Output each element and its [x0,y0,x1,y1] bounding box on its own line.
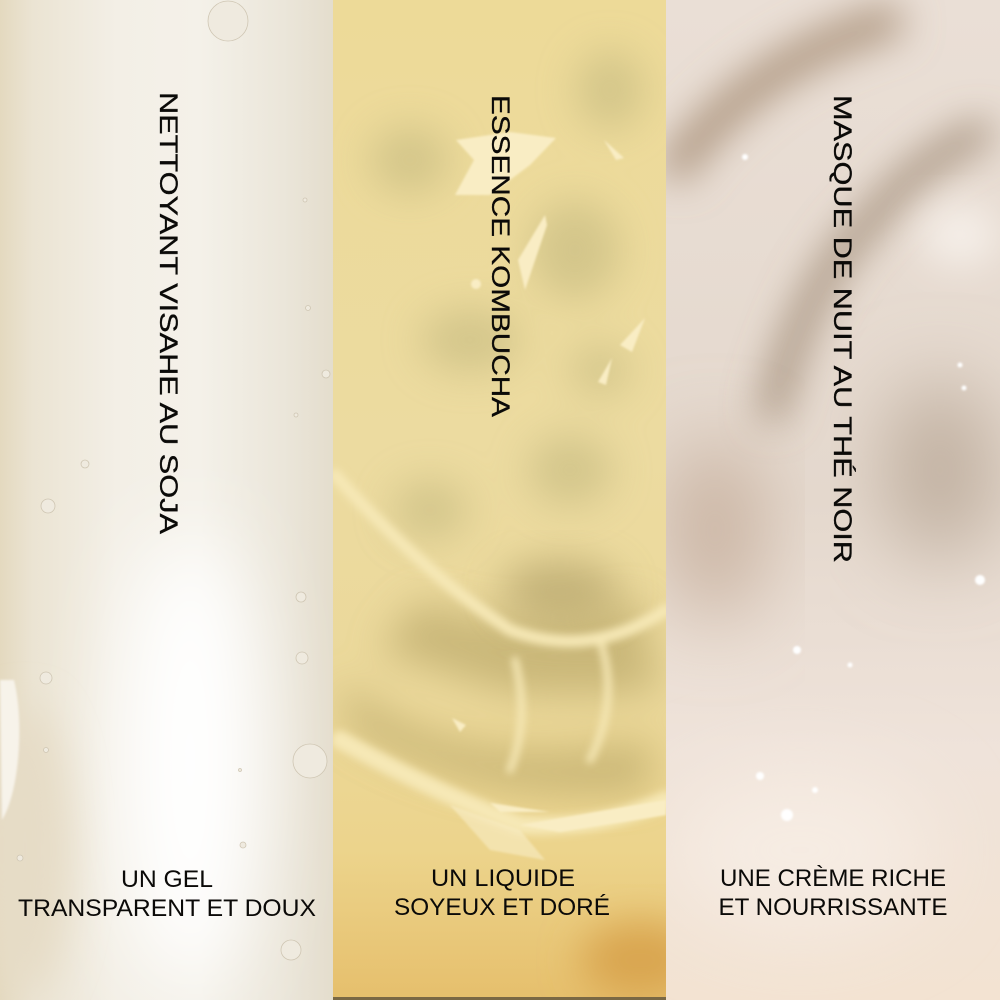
heading: Essence kombucha: ESSENCE KOMBUCHA [486,95,514,417]
caption: gel [18,866,316,922]
caption: creme [718,865,948,921]
caption: creme: UNE CRÈME RICHE [720,865,946,892]
panel: soy cleanser gel texture [0,0,333,1000]
caption: creme: ET NOURRISSANTE [718,894,948,921]
panel: kombucha essence texture [333,0,700,1000]
caption: liquide [394,865,610,921]
heading: Masque de nuit au the noir: MASQUE DE NUIT AU THÉ NOIR [828,95,857,563]
heading: Nettoyant visage au soja: NETTOYANT VISAHE AU SOJA [154,92,182,534]
panel: black tea night mask texture [666,0,1000,1000]
caption: gel: UN GEL [121,866,213,893]
caption: gel: TRANSPARENT ET DOUX [18,895,316,922]
caption: liquide: SOYEUX ET DORÉ [394,894,610,921]
caption: liquide: UN LIQUIDE [431,865,575,892]
